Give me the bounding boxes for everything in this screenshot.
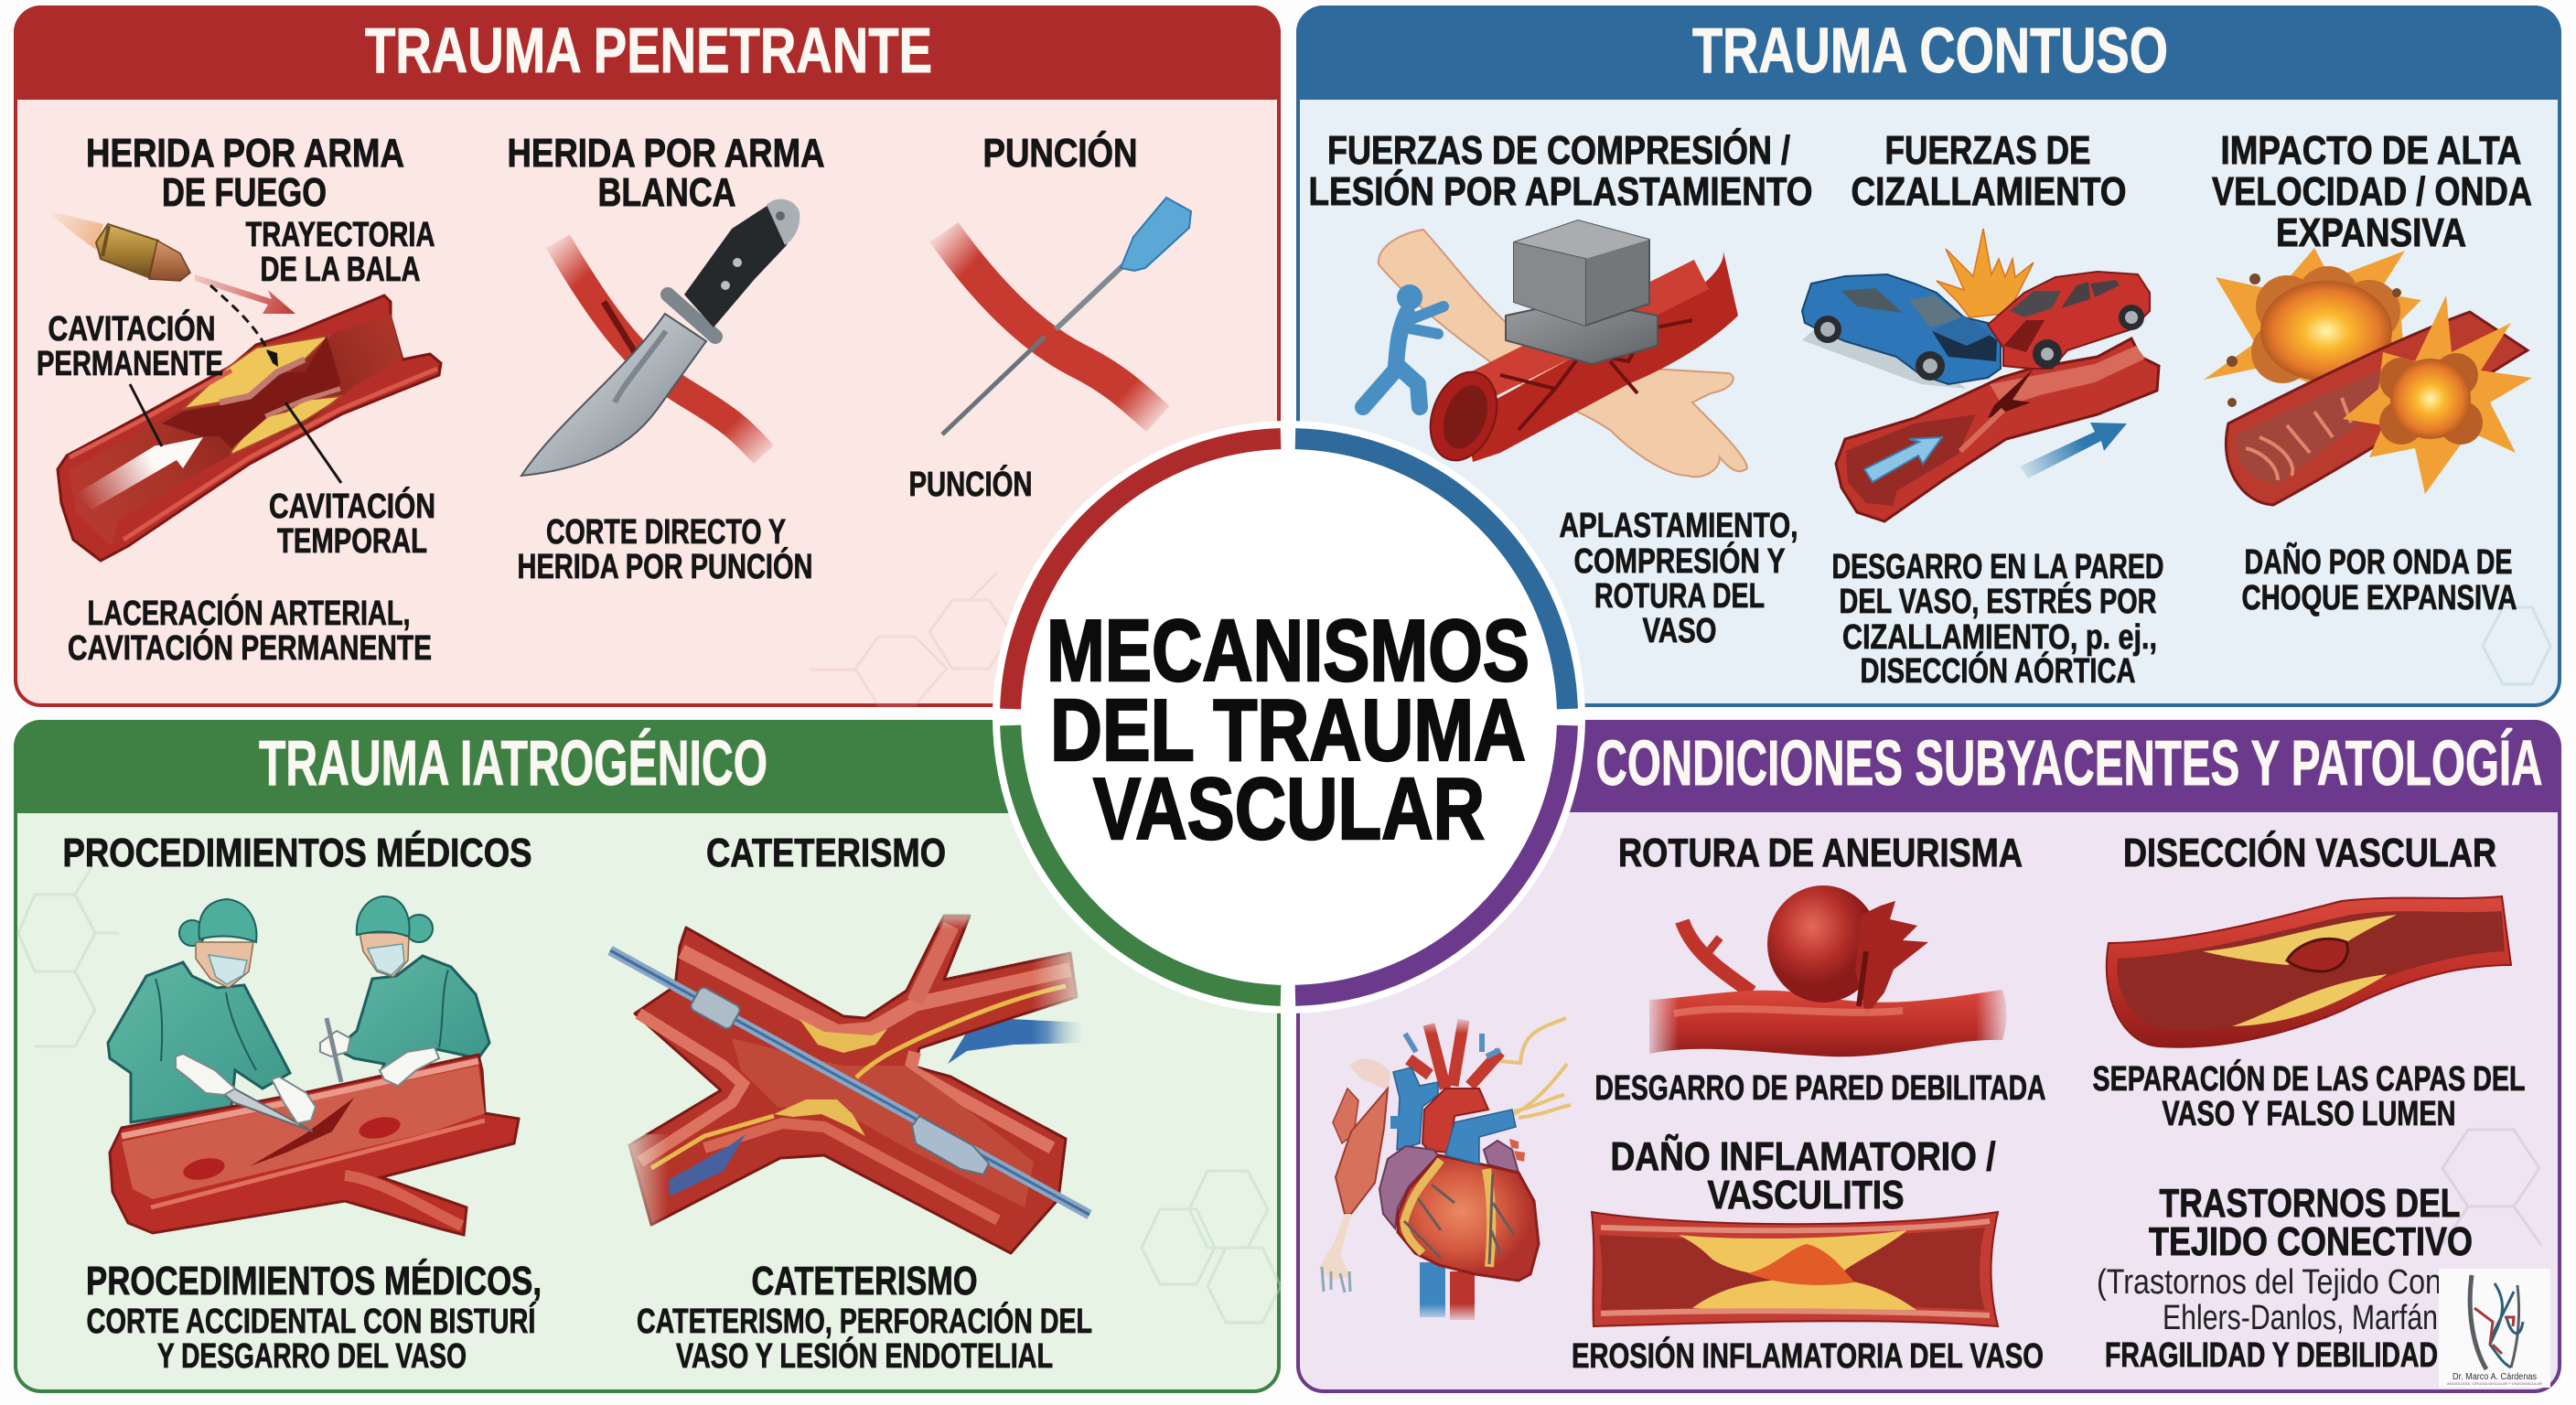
heading: trastornos del tejido conectivo: TRASTORNOS DEL bbox=[2159, 1181, 2461, 1226]
scalpel held by right surgeon bbox=[327, 1018, 341, 1082]
heading: herida por arma blanca: HERIDA POR ARMA bbox=[507, 131, 825, 176]
caption: desgarro en la pared: DISECCIÓN AÓRTICA bbox=[1861, 650, 2135, 691]
illustration: knife over vessel bbox=[521, 199, 800, 476]
illustration: vascular dissection bbox=[2107, 896, 2511, 1047]
heading: fuerzas de compresión: LESIÓN POR APLASTAMIENTO bbox=[1308, 168, 1813, 214]
label: cavitación permanente: CAVITACIÓN bbox=[48, 308, 216, 349]
heading: fuerzas de compresión: FUERZAS DE COMPRESIÓN / bbox=[1327, 127, 1790, 173]
label: cavitación temporal: TEMPORAL bbox=[277, 522, 427, 561]
nerves bbox=[1500, 1018, 1571, 1118]
heading: daño inflamatorio bbox=[1610, 1133, 1996, 1217]
caption: cateterismo: CATETERISMO, PERFORACIÓN DEL bbox=[637, 1301, 1092, 1341]
caption: desgarro en la pared bbox=[1831, 548, 2164, 691]
heading: impacto de alta velocidad: EXPANSIVA bbox=[2276, 210, 2466, 255]
heading: herida por arma blanca: BLANCA bbox=[598, 170, 735, 215]
caption: cateterismo: CATETERISMO bbox=[752, 1259, 977, 1303]
arrow: dashed trajectory bbox=[210, 285, 278, 367]
decorative hexagons bbox=[2442, 1130, 2541, 1245]
caption: separación de capas bbox=[2093, 1058, 2525, 1133]
header: trauma iatrogénico bbox=[16, 722, 1279, 811]
header: trauma contuso bbox=[1298, 7, 2560, 98]
heading: procedimientos médicos: PROCEDIMIENTOS MÉDICOS bbox=[62, 830, 532, 875]
caption: aplastamiento: APLASTAMIENTO, bbox=[1559, 507, 1798, 545]
caption: cateterismo bbox=[637, 1259, 1092, 1376]
heading: trastornos del tejido conectivo bbox=[2149, 1181, 2473, 1264]
heading: trastornos del tejido conectivo: TEJIDO CONECTIVO bbox=[2149, 1219, 2473, 1264]
caption: desgarro de pared: DESGARRO DE PARED DEBILITADA bbox=[1595, 1069, 2045, 1108]
title: MECANISMOS bbox=[1046, 602, 1530, 700]
label: cavitación permanente bbox=[37, 308, 223, 383]
text: tejido conectivo detail bbox=[2097, 1263, 2442, 1375]
gloved hands bbox=[176, 1031, 439, 1123]
arrow: white flow arrow bbox=[76, 437, 203, 509]
ring arc: blue bbox=[1295, 439, 1567, 709]
illustration: ruptured aneurysm bbox=[1642, 885, 2012, 1061]
icon: bullet with trail bbox=[46, 210, 190, 281]
icon: blue car bbox=[1802, 274, 2001, 389]
caption: desgarro en la pared: DESGARRO EN LA PARED bbox=[1831, 548, 2164, 586]
pointer lines bbox=[130, 384, 341, 483]
center badge: mecanismos del trauma vascular bbox=[993, 421, 1585, 1014]
label: cavitación temporal bbox=[269, 486, 435, 561]
label: cavitación temporal: CAVITACIÓN bbox=[269, 486, 435, 526]
caption: cateterismo: VASO Y LESIÓN ENDOTELIAL bbox=[676, 1335, 1053, 1376]
decorative hexagons bbox=[18, 867, 1281, 1323]
logo: Dr. Marco A. Cárdenas: ANGIOLOGÍA, CIRUGÍA VASCULAR Y ENDOVASCULAR bbox=[2447, 1381, 2542, 1386]
label: trayectoria de la bala: DE LA BALA bbox=[260, 251, 421, 289]
illustration: catheter inside branching vessel bbox=[610, 906, 1096, 1253]
icon: blue figure pushing bbox=[1363, 284, 1444, 407]
vessel: opened artery with branch bbox=[110, 1055, 519, 1235]
heading: herida por arma de fuego bbox=[86, 131, 404, 215]
header: trauma iatrogénico: TRAUMA IATROGÉNICO bbox=[259, 727, 767, 799]
caption: laceración arterial bbox=[68, 593, 432, 668]
caption: procedimientos médicos: CORTE ACCIDENTAL CON BISTURÍ bbox=[86, 1301, 537, 1341]
text: tejido conectivo detail: FRAGILIDAD Y DEBILIDAD bbox=[2105, 1336, 2438, 1375]
caption: aplastamiento bbox=[1559, 507, 1798, 650]
caption: laceración arterial: LACERACIÓN ARTERIAL, bbox=[88, 593, 410, 633]
caption: procedimientos médicos: PROCEDIMIENTOS MÉDICOS, bbox=[86, 1258, 542, 1303]
heading: punción: PUNCIÓN bbox=[982, 130, 1138, 176]
label: trayectoria de la bala: TRAYECTORIA bbox=[245, 216, 435, 254]
heading: disección vascular: DISECCIÓN VASCULAR bbox=[2123, 830, 2496, 875]
text: tejido conectivo detail: Ehlers-Danlos, Marfán bbox=[2163, 1299, 2438, 1337]
figure: left surgeon bbox=[108, 899, 290, 1122]
caption: corte directo: HERIDA POR PUNCIÓN bbox=[518, 546, 812, 586]
text: tejido conectivo detail: (Trastornos del Tejido Con bbox=[2097, 1263, 2442, 1302]
heading: herida por arma de fuego: DE FUEGO bbox=[162, 170, 327, 215]
header: trauma contuso: TRAUMA CONTUSO bbox=[1692, 15, 2168, 86]
illustration: inflamed vessel bbox=[1592, 1212, 1998, 1326]
caption: procedimientos médicos: Y DESGARRO DEL VASO bbox=[157, 1337, 467, 1376]
label: trayectoria de la bala bbox=[245, 216, 435, 289]
panel: trauma iatrogénico bbox=[16, 722, 1281, 1391]
ring arc: red bbox=[1011, 439, 1281, 709]
caption: separación de capas: VASO Y FALSO LUMEN bbox=[2163, 1095, 2455, 1133]
illustration: surgeons cutting vessel bbox=[108, 896, 519, 1235]
caption: punción: PUNCIÓN bbox=[909, 464, 1032, 504]
caption: desgarro en la pared: DEL VASO, ESTRÉS POR bbox=[1839, 581, 2157, 621]
title: DEL TRAUMA bbox=[1050, 681, 1526, 779]
icon: collision burst bbox=[1937, 229, 2034, 317]
decorative hexagons bbox=[2483, 607, 2550, 684]
logo: Dr. Marco A. Cárdenas bbox=[2439, 1269, 2550, 1388]
heart body bbox=[1379, 1110, 1539, 1281]
illustration: lacerated artery bbox=[58, 295, 441, 561]
heading: daño inflamatorio: VASCULITIS bbox=[1707, 1173, 1905, 1217]
caption: aplastamiento: VASO bbox=[1643, 612, 1716, 650]
panel: condiciones subyacentes y patología bbox=[1298, 722, 2560, 1391]
heading: daño inflamatorio: DAÑO INFLAMATORIO / bbox=[1610, 1133, 1996, 1179]
heading: fuerzas de cizallamiento bbox=[1852, 128, 2126, 214]
caption: procedimientos médicos bbox=[86, 1258, 542, 1376]
illustration: torn vessel under shear bbox=[1836, 338, 2159, 521]
heading: herida por arma de fuego: HERIDA POR ARMA bbox=[86, 131, 404, 176]
title bbox=[1046, 602, 1530, 858]
decorative hexagons bbox=[810, 573, 1039, 705]
illustration: blast-damaged vessel bbox=[2204, 248, 2532, 505]
great vessels bbox=[1390, 1020, 1500, 1320]
label: cavitación permanente: PERMANENTE bbox=[37, 345, 223, 383]
caption: corte directo bbox=[518, 513, 812, 586]
caption: corte directo: CORTE DIRECTO Y bbox=[546, 513, 786, 552]
heading: cateterismo: CATETERISMO bbox=[706, 831, 946, 875]
heading: herida por arma blanca bbox=[507, 131, 825, 215]
logo: Dr. Marco A. Cárdenas: Dr. Marco A. Cárdenas bbox=[2453, 1372, 2537, 1382]
caption: daño por onda bbox=[2241, 542, 2517, 617]
title: VASCULAR bbox=[1093, 760, 1485, 858]
illustration: needle puncture bbox=[942, 198, 1191, 434]
heading: fuerzas de cizallamiento: FUERZAS DE bbox=[1884, 128, 2091, 173]
caption: erosión inflamatoria: EROSIÓN INFLAMATORIA DEL VASO bbox=[1572, 1335, 2044, 1376]
illustration: heart and arm anatomy bbox=[1319, 1015, 1571, 1324]
header: trauma penetrante bbox=[16, 7, 1279, 98]
panel: trauma contuso bbox=[1298, 7, 2560, 705]
ring arc: green bbox=[1011, 725, 1281, 995]
heading: impacto de alta velocidad: IMPACTO DE ALTA bbox=[2221, 128, 2521, 173]
heading: rotura de aneurisma: ROTURA DE ANEURISMA bbox=[1618, 831, 2023, 875]
heading: fuerzas de cizallamiento: CIZALLAMIENTO bbox=[1852, 169, 2126, 214]
caption: desgarro en la pared: CIZALLAMIENTO, p. ej., bbox=[1842, 618, 2157, 657]
caption: aplastamiento: ROTURA DEL bbox=[1594, 577, 1765, 616]
ring arc: purple bbox=[1295, 725, 1567, 995]
scalpel bbox=[220, 1082, 313, 1132]
heading: impacto de alta velocidad bbox=[2212, 128, 2532, 255]
icon: red car bbox=[1988, 272, 2150, 369]
panel: trauma penetrante bbox=[16, 7, 1279, 705]
arm muscles bbox=[1319, 1058, 1390, 1292]
header: condiciones subyacentes bbox=[1298, 722, 2560, 810]
header: trauma penetrante: TRAUMA PENETRANTE bbox=[365, 15, 932, 86]
figure: right surgeon bbox=[345, 896, 489, 1070]
caption: aplastamiento: COMPRESIÓN Y bbox=[1573, 541, 1786, 581]
caption: laceración arterial: CAVITACIÓN PERMANENTE bbox=[68, 627, 432, 668]
arrow: bullet trajectory bbox=[195, 274, 295, 314]
heading: fuerzas de compresión bbox=[1308, 127, 1813, 214]
illustration: crushed arm, vessel and block bbox=[1379, 220, 1747, 477]
